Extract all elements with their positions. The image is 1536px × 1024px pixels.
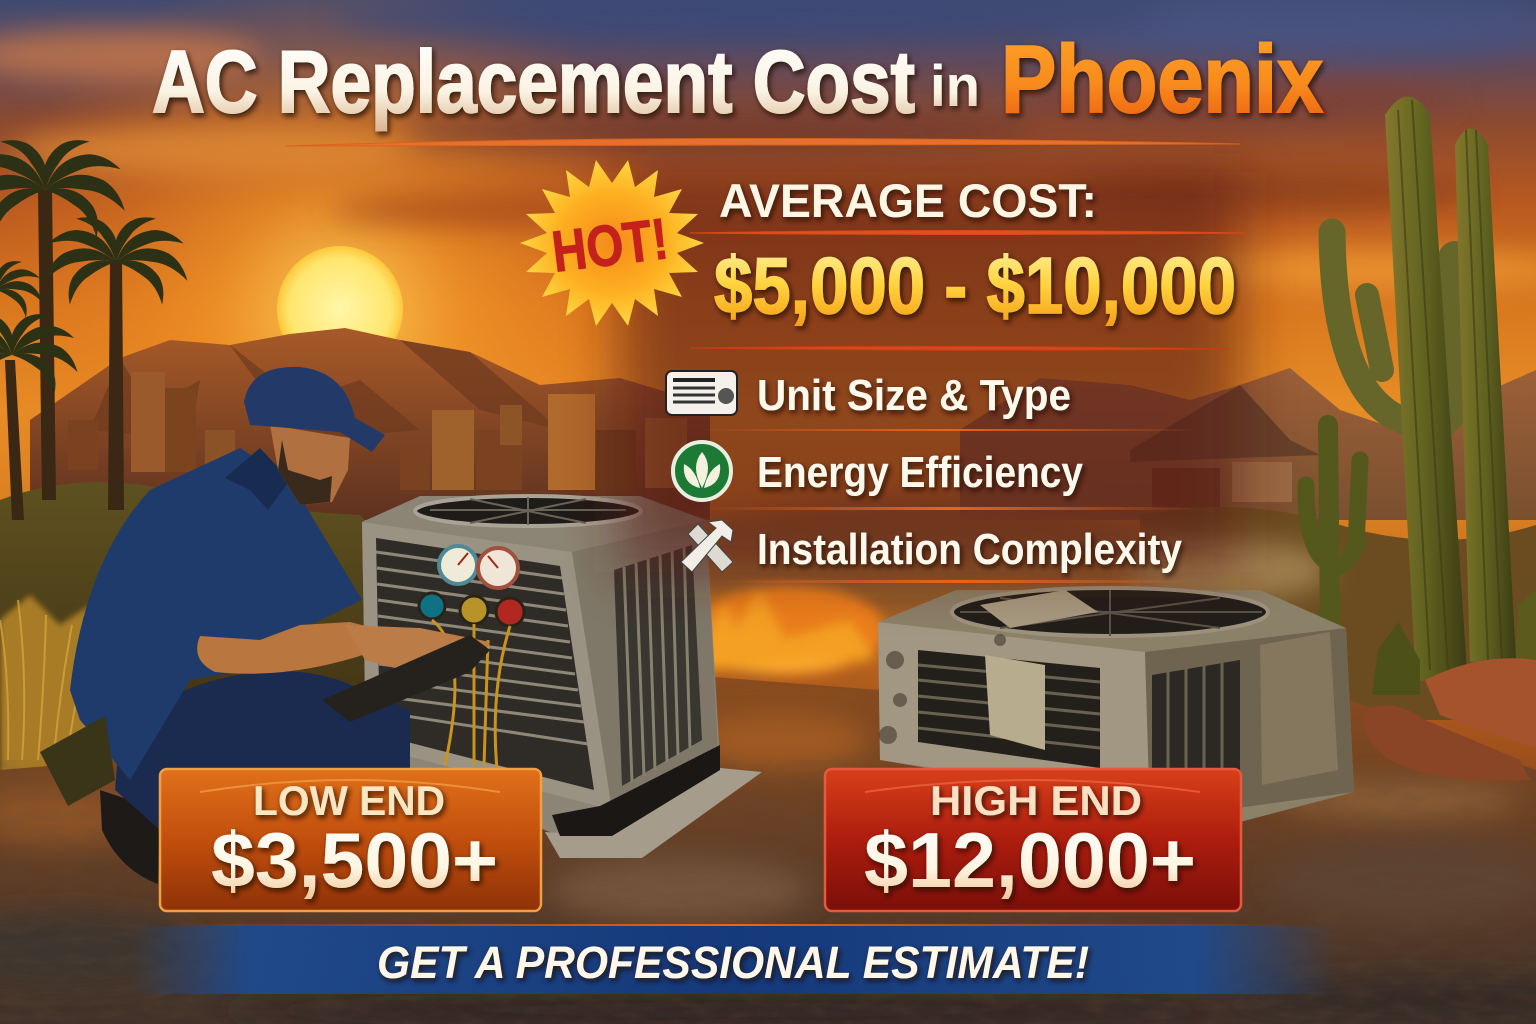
average cost divider bbox=[690, 230, 1245, 234]
factor: installation complexity bbox=[681, 520, 1182, 574]
banner: call to action: GET A PROFESSIONAL ESTIMATE! bbox=[377, 937, 1089, 988]
saguaro cacti bbox=[1306, 96, 1536, 695]
average cost heading: AVERAGE COST: bbox=[719, 174, 1097, 227]
average cost range: $5,000 - $10,000 bbox=[714, 241, 1236, 330]
banner: call to action bbox=[130, 924, 1340, 994]
ground bbox=[0, 676, 1536, 1024]
callout: low end: LOW END bbox=[253, 777, 445, 824]
factor: energy efficiency bbox=[673, 442, 1083, 500]
factor: energy efficiency: Energy Efficiency bbox=[757, 448, 1083, 497]
factor: installation complexity: Installation Complexity bbox=[757, 525, 1182, 574]
sun bbox=[277, 246, 403, 372]
palm trees bbox=[0, 128, 187, 520]
callout: low end bbox=[160, 769, 541, 911]
title: AC Replacement Cost bbox=[152, 32, 915, 131]
fire glow behind units bbox=[685, 585, 885, 675]
icon: crossed tools bbox=[681, 520, 733, 572]
callout: low end: $3,500+ bbox=[211, 816, 498, 904]
city skyline bbox=[68, 372, 1292, 508]
divider bbox=[700, 507, 1200, 510]
callout: high end: $12,000+ bbox=[864, 816, 1196, 904]
vegetation and distant scrub bbox=[0, 482, 1536, 780]
icon: ac unit bbox=[666, 371, 737, 415]
title underline bbox=[285, 138, 1240, 146]
callout: high end bbox=[825, 769, 1241, 911]
panel: average cost and factors backdrop bbox=[620, 172, 1240, 572]
title: in bbox=[930, 54, 980, 119]
desert rocks bbox=[1362, 658, 1536, 781]
HOT burst badge bbox=[520, 160, 704, 326]
callout: high end: HIGH END bbox=[930, 777, 1142, 824]
old rusted AC unit bbox=[878, 588, 1354, 822]
title: Phoenix bbox=[1001, 26, 1323, 133]
HOT burst badge: HOT! bbox=[549, 206, 672, 285]
divider bbox=[700, 429, 1200, 431]
technician bbox=[40, 367, 490, 884]
mountains bbox=[30, 328, 1536, 520]
icon: gauges bbox=[419, 546, 524, 770]
new AC unit with gauges bbox=[362, 496, 762, 858]
range divider bbox=[690, 346, 1230, 350]
factor: unit size and type: Unit Size & Type bbox=[757, 371, 1071, 420]
divider bbox=[720, 580, 1200, 583]
icon: leaf badge bbox=[673, 442, 731, 500]
